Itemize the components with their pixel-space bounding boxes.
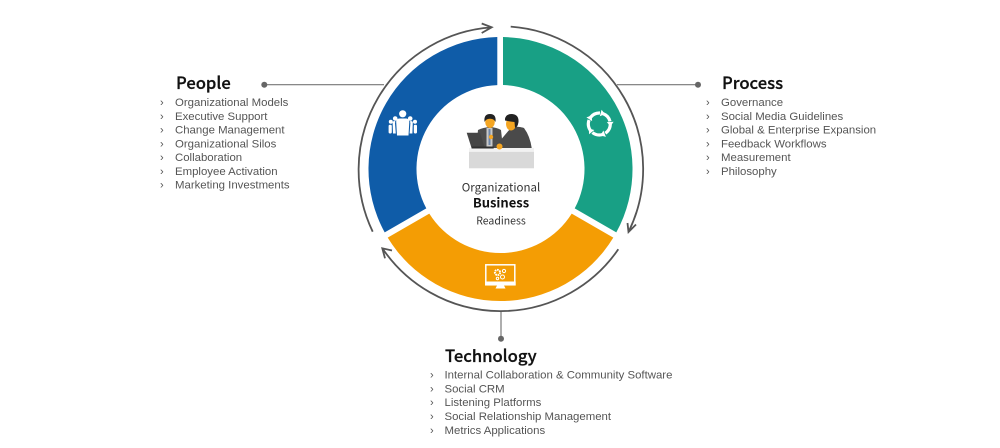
list: people items: Organizational Models [175, 97, 289, 109]
list: people items: Marketing Investments [175, 180, 290, 192]
list: people items: › [160, 180, 164, 192]
icon: process cycle [586, 110, 614, 139]
list: process items: Global & Enterprise Expansion [721, 124, 876, 136]
list: people items: › [160, 124, 164, 136]
list: process items: › [706, 138, 710, 150]
leader: process [617, 82, 701, 88]
list: technology items: Social Relationship Management [444, 411, 612, 423]
left man [476, 127, 503, 148]
center label [462, 180, 540, 228]
segment: technology (orange) [388, 214, 613, 301]
right man [496, 127, 532, 148]
list: people items [160, 97, 290, 192]
desk [469, 152, 534, 168]
list: process items [706, 97, 876, 178]
laptop [467, 133, 485, 148]
arrow: people to process [359, 24, 492, 232]
list: process items: › [706, 152, 710, 164]
list: technology items: › [430, 411, 434, 423]
list: technology items: › [430, 425, 434, 437]
panel: people [160, 70, 290, 192]
list: process items: › [706, 111, 710, 123]
heading: Process: Process [722, 70, 783, 94]
heading: Technology: Technology [445, 343, 537, 367]
leader: people [261, 82, 384, 88]
list: technology items: Social CRM [444, 384, 505, 396]
hands [496, 144, 502, 150]
list: technology items: Internal Collaboration & Community Software [444, 370, 672, 382]
list: process items: Measurement [721, 152, 791, 164]
panel: technology [430, 343, 672, 437]
list: process items: Governance [721, 97, 783, 109]
list: technology items [430, 370, 672, 437]
list: people items: Change Management [175, 124, 285, 136]
list: process items: › [706, 97, 710, 109]
list: process items: Philosophy [721, 166, 777, 178]
list: people items: › [160, 111, 164, 123]
list: people items: › [160, 97, 164, 109]
list: technology items: Listening Platforms [444, 397, 542, 409]
list: technology items: Metrics Applications [444, 425, 545, 437]
Readiness: Readiness [476, 214, 526, 228]
arrow: process to technology [511, 27, 643, 232]
leader: technology [498, 312, 504, 342]
list: process items: Feedback Workflows [721, 138, 827, 150]
list: technology items: › [430, 384, 434, 396]
list: people items: Executive Support [175, 111, 268, 123]
list: process items: › [706, 124, 710, 136]
list: technology items: › [430, 397, 434, 409]
Organizational: Organizational [462, 180, 540, 196]
heading: People: People [176, 70, 231, 94]
list: people items: › [160, 152, 164, 164]
list: people items: Employee Activation [175, 166, 278, 178]
list: process items: Social Media Guidelines [721, 111, 844, 123]
icon: monitor with gears [485, 265, 516, 288]
panel: process [706, 70, 876, 178]
cycle arrows around donut [359, 24, 643, 311]
list: process items: › [706, 166, 710, 178]
list: people items: › [160, 138, 164, 150]
list: technology items: › [430, 370, 434, 382]
list: people items: Collaboration [175, 152, 242, 164]
icon: people group [389, 110, 417, 136]
list: people items: › [160, 166, 164, 178]
segment: people (blue) [368, 37, 497, 232]
icon: business people at desk [467, 114, 534, 168]
arrow: technology to people [382, 248, 618, 311]
list: people items: Organizational Silos [175, 138, 277, 150]
donut diagram [368, 37, 633, 301]
segment: process (teal) [503, 37, 633, 232]
Business: Business [473, 192, 529, 212]
